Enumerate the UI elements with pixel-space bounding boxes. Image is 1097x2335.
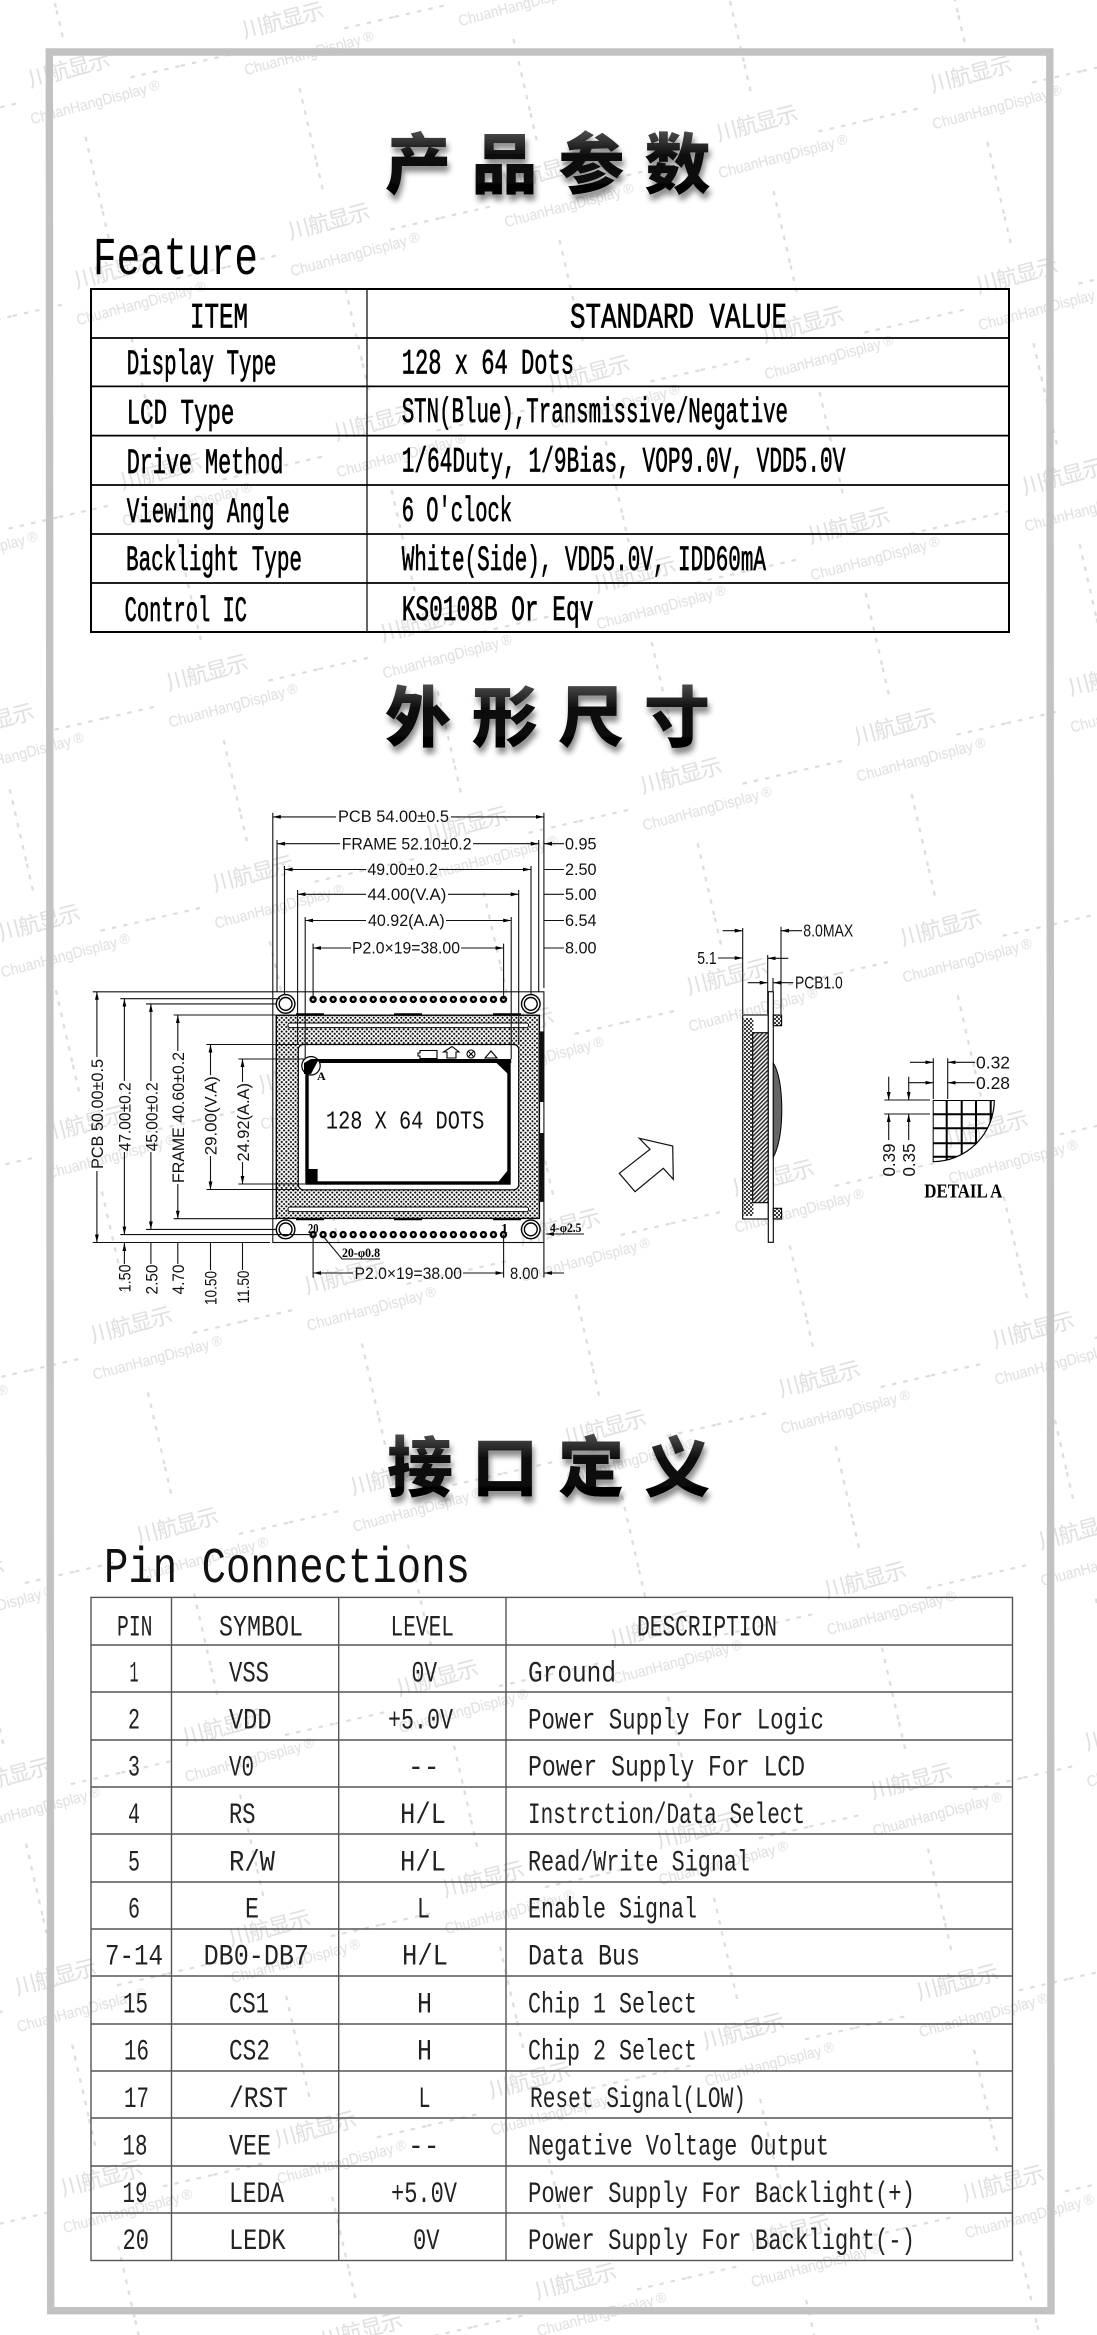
row: backlight type: White(Side), VDD5.0V, IDD60mA	[402, 541, 766, 581]
row: pin 19: Power Supply For Backlight(+)	[528, 2178, 915, 2212]
bottom pitch dimension: P2.0×19=38.00	[354, 1265, 462, 1283]
pin table grid	[91, 1597, 1012, 2260]
row: pin 17: /RST	[229, 2083, 288, 2117]
detail arc	[933, 1100, 994, 1162]
row: pin 15: CS1	[229, 1988, 269, 2022]
row: pin 16: H	[417, 2036, 432, 2070]
row: drive method: Drive Method	[127, 444, 283, 484]
row: pin 5: H/L	[400, 1846, 446, 1880]
header row	[190, 298, 787, 338]
row: pin 6: L	[417, 1894, 430, 1928]
row: pin 2: +5.0V	[388, 1705, 453, 1739]
viewing window	[298, 1044, 519, 1190]
pin hole callout	[323, 1236, 380, 1260]
dimension: 40.92 A.A: 40.92(A.A)	[368, 912, 445, 930]
frame slots	[288, 1023, 528, 1212]
row: pin 15	[123, 1988, 697, 2022]
front view drawing	[89, 808, 597, 1305]
row: pin 20: LEDK	[229, 2225, 286, 2259]
feature table grid	[91, 289, 1009, 632]
heading: product parameters: 参	[558, 128, 624, 202]
row: pin 20	[122, 2225, 915, 2259]
dimension: PCB height: PCB 50.00±0.5	[89, 1059, 107, 1169]
row: pin 6: Enable Signal	[528, 1894, 697, 1928]
row: viewing angle: 6 O'clock	[402, 492, 512, 532]
pin hole callout: 20-φ0.8	[342, 1245, 380, 1260]
dimension: pin pitch top: P2.0×19=38.00	[352, 940, 460, 958]
row: pins 7-14: 7-14	[105, 1941, 163, 1975]
row: pin 1: VSS	[229, 1658, 269, 1692]
top dimensions	[273, 808, 597, 958]
status icons	[418, 1046, 497, 1058]
row: control IC	[125, 591, 593, 632]
side view body	[743, 1015, 768, 1219]
row: pin 4: RS	[229, 1799, 256, 1833]
row: viewing angle	[127, 492, 512, 533]
row: pin 2: Power Supply For Logic	[528, 1705, 824, 1739]
row: pin 15: 15	[123, 1988, 148, 2022]
row: display type	[127, 344, 574, 385]
row: pin 1: 0V	[412, 1658, 437, 1692]
row: pin 3: 3	[128, 1752, 140, 1786]
row: pin 18	[122, 2130, 829, 2164]
row: pin 3: Power Supply For LCD	[528, 1752, 805, 1786]
header row: ITEM	[190, 298, 248, 338]
dimension: 5.1: 5.1	[697, 948, 717, 968]
active area	[305, 1059, 511, 1183]
header row: STANDARD VALUE	[570, 298, 787, 338]
heading: outline dimensions	[385, 681, 710, 755]
bottom pitch dimension: 8.00	[510, 1265, 539, 1283]
row: LCD type	[127, 393, 788, 434]
dimension: 0.28: 0.28	[976, 1073, 1010, 1093]
heading: interface definition: 定	[558, 1431, 624, 1505]
detail A marker: A	[317, 1069, 326, 1083]
right offset labels	[544, 836, 597, 958]
dimension: 0.35	[899, 1077, 919, 1176]
dimension: PCB width: PCB 54.00±0.5	[338, 808, 449, 826]
row: pin 19	[122, 2178, 915, 2212]
row: pin 19: 19	[122, 2178, 148, 2212]
heading: outline dimensions: 形	[472, 681, 538, 755]
row: pins 7-14: Data Bus	[528, 1941, 640, 1975]
dimension: 47.00: 47.00±0.2	[117, 1082, 135, 1151]
dimension: 0.39	[879, 1077, 899, 1176]
row: pin 3: --	[408, 1752, 440, 1786]
row: pin 16: CS2	[229, 2036, 270, 2070]
row: pins 7-14	[105, 1941, 640, 1975]
dimension: 0.35: 0.35	[899, 1144, 919, 1176]
row: pin 15: Chip 1 Select	[528, 1988, 697, 2022]
row: pin 2	[128, 1705, 824, 1739]
row: control IC: Control IC	[125, 592, 247, 632]
PCB plate	[768, 992, 773, 1242]
row: pin 20: 0V	[413, 2225, 440, 2259]
dimension: 5.1	[697, 931, 743, 968]
dimension: 0.28	[908, 1073, 1010, 1093]
LCD frame with dot mesh	[276, 1015, 539, 1218]
top pin row	[313, 996, 504, 1003]
row: pin 1: Ground	[528, 1658, 616, 1692]
row: pin 6: E	[245, 1894, 259, 1928]
row: viewing angle: Viewing Angle	[127, 493, 290, 533]
row: pin 20: Power Supply For Backlight(-)	[528, 2225, 915, 2259]
row: pins 7-14: H/L	[402, 1941, 448, 1975]
row: pin 17	[124, 2083, 746, 2117]
frame tabs	[296, 1014, 521, 1220]
row: pin 3	[128, 1752, 805, 1786]
dimension: 49.00: 49.00±0.2	[368, 861, 438, 879]
heading: interface definition: 义	[644, 1431, 710, 1505]
row: pin 19: LEDA	[229, 2178, 284, 2212]
row: pin 18: Negative Voltage Output	[528, 2130, 829, 2164]
row: pin 18: --	[408, 2130, 440, 2164]
row: pin 5: Read/Write Signal	[528, 1846, 750, 1880]
bottom pin row	[313, 1231, 504, 1238]
row: pin 6: 6	[128, 1894, 140, 1928]
heading: interface definition: 接	[387, 1431, 453, 1505]
pin table header: SYMBOL	[219, 1612, 303, 1646]
right offset labels: 8.00	[565, 940, 597, 958]
dimension: PCB thickness	[748, 972, 843, 992]
right offset labels: 5.00	[565, 886, 597, 904]
pin number labels	[308, 1222, 508, 1237]
feature subtitle: Feature	[93, 230, 258, 291]
row: pin 17: Reset Signal(LOW)	[530, 2083, 746, 2117]
row: pin 16: 16	[124, 2036, 149, 2070]
right offset labels: 6.54	[565, 912, 597, 930]
row: pin 4: 4	[128, 1799, 140, 1833]
dimension: PCB thickness: PCB1.0	[795, 972, 843, 992]
row: control IC: KS0108B Or Eqv	[402, 591, 593, 631]
row: pin 1: 1	[130, 1658, 138, 1692]
side view dimension lines	[743, 927, 781, 1014]
row: pin 16	[124, 2036, 697, 2070]
display resolution label: 128 X 64 DOTS	[326, 1106, 484, 1136]
dimension: frame width: FRAME 52.10±0.2	[342, 836, 472, 854]
row: pin 4: H/L	[400, 1799, 446, 1833]
side view drawing	[697, 921, 854, 1242]
row: display type: 128 x 64 Dots	[402, 344, 574, 384]
connector blocks	[773, 1015, 782, 1219]
row: pin 18: 18	[122, 2130, 148, 2164]
horizontal extension lines	[93, 992, 311, 1242]
dimension: 24.92 A.A	[235, 1059, 253, 1184]
heading: outline dimensions: 寸	[644, 681, 710, 755]
row: pin 5: R/W	[229, 1846, 275, 1880]
row: pin 6	[128, 1894, 697, 1928]
bottom offset labels	[117, 1243, 253, 1305]
feature table	[91, 289, 1009, 632]
row: pin 3: V0	[229, 1752, 254, 1786]
bottom offset labels: 10.50	[203, 1271, 221, 1305]
mounting holes	[276, 995, 540, 1239]
row: pin 5	[128, 1846, 750, 1880]
right offset labels: 2.50	[565, 861, 597, 879]
heading: product parameters: 产	[385, 128, 451, 202]
dimension: 0.32: 0.32	[976, 1052, 1010, 1072]
dimension: 24.92 A.A: 24.92(A.A)	[235, 1083, 253, 1162]
left dimensions	[89, 992, 253, 1305]
pin table	[91, 1597, 1012, 2260]
right offset labels: 0.95	[565, 836, 597, 854]
dimension: 29.00 V.A: 29.00(V.A)	[203, 1076, 221, 1155]
pin table header	[117, 1612, 777, 1646]
side bars	[539, 1031, 544, 1202]
row: pin 4: Instrction/Data Select	[528, 1799, 805, 1833]
pin number labels: 1	[501, 1222, 508, 1237]
PCB outline	[273, 992, 544, 1242]
dimension: gap arrows	[768, 957, 788, 959]
bottom pitch dimension	[313, 1265, 564, 1283]
pin table header: LEVEL	[390, 1612, 454, 1646]
heading: product parameters: 数	[644, 128, 710, 202]
pin table header: DESCRIPTION	[637, 1612, 777, 1646]
bottom offset labels: 4.70	[170, 1264, 188, 1294]
row: pin 5: 5	[128, 1846, 140, 1880]
vertical extension lines	[273, 813, 544, 1278]
row: drive method	[127, 442, 845, 484]
heading: outline dimensions: 尺	[558, 681, 624, 755]
row: pins 7-14: DB0-DB7	[204, 1941, 309, 1975]
pin connections subtitle: Pin Connections	[104, 1541, 470, 1598]
heading: interface definition	[387, 1431, 710, 1505]
bottom offset labels: 1.50	[117, 1264, 135, 1292]
detail A marker	[302, 1057, 326, 1083]
heading: outline dimensions: 外	[385, 681, 451, 755]
dimension: 8.0 max: 8.0MAX	[803, 921, 854, 941]
heading: product parameters	[385, 128, 710, 202]
detail A caption: DETAIL A	[924, 1180, 1003, 1202]
detail A drawing	[879, 1052, 1010, 1202]
row: pin 2: 2	[128, 1705, 140, 1739]
bottom offset labels: 2.50	[144, 1264, 162, 1294]
direction arrow	[619, 1138, 673, 1192]
row: pin 19: +5.0V	[391, 2178, 457, 2212]
mounting hole callout: 4-φ2.5	[550, 1220, 582, 1235]
dimension: 8.0 max	[781, 921, 854, 941]
dimension: 45.00: 45.00±0.2	[144, 1082, 162, 1151]
dimension: 0.32	[910, 1052, 1010, 1072]
row: pin 2: VDD	[229, 1705, 272, 1739]
row: pin 4	[128, 1799, 805, 1833]
row: LCD type: STN(Blue),Transmissive/Negative	[402, 393, 788, 433]
dimension: 44.00 V.A: 44.00(V.A)	[368, 886, 446, 904]
dimension: 0.39: 0.39	[879, 1144, 899, 1176]
row: backlight type	[126, 541, 766, 581]
row: pin 15: H	[417, 1988, 432, 2022]
bottom offset labels: 11.50	[235, 1270, 253, 1304]
heading: interface definition: 口	[472, 1431, 538, 1505]
row: pin 20: 20	[122, 2225, 149, 2259]
row: pin 17: L	[418, 2083, 430, 2117]
detail grid	[932, 1100, 994, 1162]
row: pin 17: 17	[124, 2083, 149, 2117]
dimension: frame height: FRAME 40.60±0.2	[170, 1052, 188, 1183]
heading: product parameters: 品	[472, 128, 538, 202]
row: backlight type: Backlight Type	[126, 541, 302, 581]
row: pin 1	[130, 1658, 616, 1692]
pin number labels: 20	[308, 1222, 318, 1237]
row: pin 16: Chip 2 Select	[528, 2036, 697, 2070]
pin table header: PIN	[117, 1612, 152, 1646]
detail dimension lines	[884, 1058, 948, 1114]
COB bulge	[773, 1063, 782, 1157]
row: display type: Display Type	[127, 345, 276, 385]
row: pin 18: VEE	[229, 2130, 271, 2164]
row: LCD type: LCD Type	[127, 394, 234, 434]
